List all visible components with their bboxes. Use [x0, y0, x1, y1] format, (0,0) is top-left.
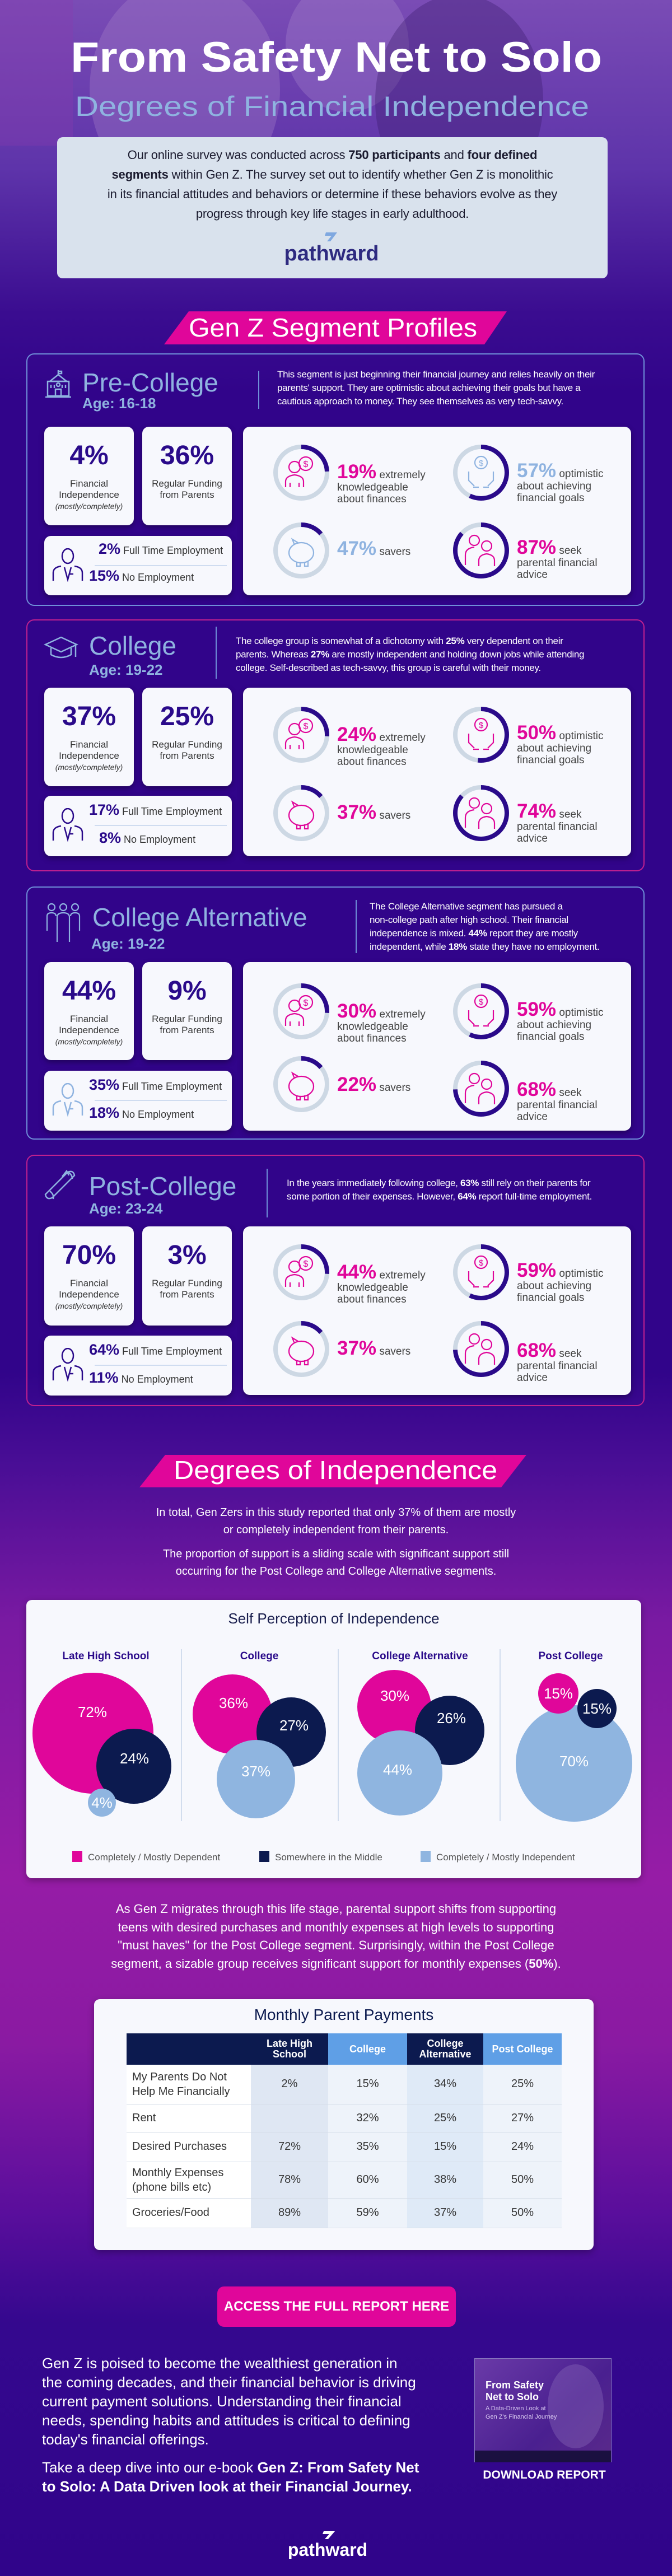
stat: financial independence — [44, 962, 134, 1060]
description: cautious approach to money. They see themselves as very tech-savvy. — [277, 396, 563, 407]
description — [277, 369, 595, 407]
employment box: 18% No Employment — [89, 1104, 194, 1121]
stats box with rings: 68% seek — [517, 1340, 581, 1361]
button: access full report — [217, 2286, 456, 2327]
description: The college group is somewhat of a dichotomy with 25% very dependent on their — [236, 636, 563, 646]
stats box with rings: financial goals — [517, 754, 584, 766]
table: Monthly Parent Payments: Post College — [492, 2043, 553, 2054]
icon: mortarboard — [44, 636, 78, 659]
stats box with rings: advice — [517, 1372, 548, 1384]
stat: regular funding: from Parents — [160, 489, 214, 500]
table: Monthly Parent Payments: 24% — [511, 2140, 534, 2153]
book cover: download report: Gen Z's Financial Journey — [486, 2414, 557, 2420]
chart: Self Perception of Independence: Post College — [538, 1650, 603, 1662]
stats box with rings: parental financial — [517, 1099, 598, 1111]
employment box: 17% Full Time Employment — [89, 801, 222, 818]
stat: regular funding: Regular Funding — [152, 1278, 222, 1289]
stat: financial independence: Financial — [70, 1014, 108, 1024]
table: Monthly Parent Payments: 2% — [282, 2078, 297, 2090]
icon: diploma — [45, 1169, 75, 1200]
degrees intro text: The proportion of support is a sliding scale with significant support still — [163, 1548, 509, 1560]
table: Monthly Parent Payments: 37% — [434, 2206, 456, 2219]
employment box — [44, 536, 232, 595]
table: Monthly Parent Payments: 50% — [511, 2173, 534, 2186]
description — [370, 901, 599, 952]
stat: financial independence: Financial — [70, 478, 108, 489]
stats box with rings: knowledgeable — [337, 482, 408, 493]
chart: Self Perception of Independence: 15% — [544, 1685, 573, 1702]
description: This segment is just beginning their financial journey and relies heavily on their — [277, 369, 595, 380]
stat: financial independence: Financial — [70, 739, 108, 750]
button: access full report: ACCESS THE FULL REPORT HERE — [224, 2299, 449, 2314]
stats box with rings: about achieving — [517, 743, 591, 754]
table: Monthly Parent Payments: 50% — [511, 2206, 534, 2219]
employment box — [44, 796, 232, 856]
stats box with rings: financial goals — [517, 1031, 584, 1043]
footer logo: pathward — [288, 2540, 367, 2559]
stat: regular funding — [142, 688, 232, 786]
table: Monthly Parent Payments: Monthly Expenses — [132, 2166, 223, 2178]
stats box with rings: about finances — [337, 493, 407, 505]
stats box with rings: knowledgeable — [337, 1021, 408, 1033]
heading: College Alternative — [92, 903, 307, 932]
bubbles: college alternative — [357, 1670, 484, 1816]
stat: regular funding: from Parents — [160, 1289, 214, 1300]
heading: Post-College — [89, 1172, 236, 1201]
closing text: current payment solutions. Understanding their financial — [42, 2393, 402, 2410]
chart: Self Perception of Independence: 72% — [78, 1704, 107, 1720]
panel: Post-College — [26, 1155, 645, 1406]
stat: financial independence: Independence — [59, 489, 119, 500]
icon: building — [45, 370, 71, 398]
hero photo background shapes — [0, 0, 543, 146]
stat: financial independence: Financial — [70, 1278, 108, 1289]
stat: financial independence: 44% — [62, 976, 116, 1006]
table: Monthly Parent Payments: Alternative — [419, 2048, 472, 2060]
chart: Self Perception of Independence: 24% — [120, 1750, 149, 1767]
ring: knowledgeable 44%: $ — [304, 1259, 309, 1269]
closing text: to Solo: A Data Driven look at their Financial Journey. — [42, 2478, 412, 2495]
ring: savers 37% — [273, 785, 329, 841]
title: Degrees of Financial Independence — [75, 91, 589, 122]
ring: savers 47% — [273, 522, 329, 578]
title — [71, 34, 602, 122]
stats box with rings — [243, 962, 631, 1131]
legend: Somewhere in the Middle — [275, 1852, 382, 1863]
book cover: download report — [474, 2358, 612, 2481]
intro text — [108, 148, 558, 221]
table: Monthly Parent Payments: Desired Purchases — [132, 2140, 227, 2153]
stat: financial independence: (mostly/completely) — [55, 1037, 123, 1046]
stats box with rings: 59% optimistic — [517, 1259, 604, 1281]
stats box with rings: about achieving — [517, 1280, 591, 1292]
legend: Completely / Mostly Independent — [436, 1852, 575, 1863]
banner: Degrees of Independence: Degrees of Independence — [174, 1455, 497, 1485]
panel: College — [26, 619, 645, 871]
bubbles: college — [193, 1674, 326, 1818]
panel: Pre-College — [26, 353, 645, 606]
table: Monthly Parent Payments: 35% — [356, 2140, 379, 2153]
table: Monthly Parent Payments: 25% — [511, 2078, 534, 2090]
table: Monthly Parent Payments: 78% — [278, 2173, 301, 2186]
stats box with rings: 68% seek — [517, 1079, 581, 1100]
description: parents. Whereas 27% are mostly independent and holding down jobs while attending — [236, 649, 584, 660]
description — [287, 1178, 592, 1202]
description: independent, while 18% state they have no employment. — [370, 941, 599, 952]
stats box with rings: 87% seek — [517, 536, 581, 558]
stats box with rings: 19% extremely — [337, 461, 426, 483]
closing text — [42, 2355, 419, 2495]
ring: knowledgeable 19%: $ — [304, 460, 309, 469]
ring: optimistic 59%: $ — [479, 997, 484, 1007]
download label: DOWNLOAD REPORT — [483, 2468, 606, 2481]
banner: Degrees of Independence — [139, 1455, 526, 1487]
stat: regular funding: from Parents — [160, 1025, 214, 1035]
stat: financial independence: Independence — [59, 1025, 119, 1035]
ring: knowledgeable 24% — [273, 707, 329, 763]
paragraph: parental support shift: teens with desired purchases and monthly expenses at high levels to supporting — [118, 1920, 554, 1934]
ring: optimistic 57%: $ — [479, 459, 484, 468]
panel: Pre-College: Age: 16-18 — [82, 395, 156, 412]
paragraph: parental support shift — [111, 1902, 561, 1970]
closing text: needs, spending habits and attitudes is critical to defining — [42, 2412, 410, 2429]
stats box with rings: 37% savers — [337, 1337, 410, 1359]
paragraph: parental support shift: segment, a sizable group receives significant support for monthly expenses (50%). — [111, 1957, 561, 1970]
closing text: the coming decades, and their financial behavior is driving — [42, 2374, 416, 2391]
employment box: 8% No Employment — [99, 829, 195, 846]
ring: optimistic 50% — [453, 707, 509, 763]
ring: parental advice 74% — [453, 785, 509, 841]
ring: savers 37% — [273, 1321, 329, 1377]
ring: optimistic 59%: $ — [479, 1258, 484, 1268]
chart: Self Perception of Independence: 4% — [91, 1794, 113, 1811]
ring: savers 22% — [273, 1056, 329, 1112]
book cover: download report: From Safety — [486, 2379, 544, 2391]
panel: College Alternative — [26, 886, 645, 1140]
stats box with rings: about achieving — [517, 1019, 591, 1031]
stats box with rings: 57% optimistic — [517, 460, 604, 482]
chart: Self Perception of Independence: Late High School — [62, 1650, 150, 1662]
closing text: today's financial offerings. — [42, 2431, 209, 2448]
heading: Pre-College — [82, 368, 218, 397]
table: Monthly Parent Payments: 34% — [434, 2078, 456, 2090]
table: Monthly Parent Payments: 32% — [356, 2111, 379, 2124]
stats box with rings: parental financial — [517, 821, 598, 833]
table: Monthly Parent Payments: 38% — [434, 2173, 456, 2186]
description: non-college path after high school. Their financial — [370, 914, 568, 925]
panel: Post-College: Age: 23-24 — [89, 1200, 162, 1217]
panel: College Alternative: Age: 19-22 — [91, 935, 165, 952]
stat: regular funding: Regular Funding — [152, 739, 222, 750]
table: Monthly Parent Payments: Monthly Parent Payments — [254, 2006, 433, 2023]
employment box — [44, 1071, 232, 1131]
description: college. Self-described as tech-savvy, this group is careful with their money. — [236, 662, 541, 673]
stats box with rings — [243, 427, 631, 595]
paragraph: parental support shift: "must haves" for the Post College segment. Surprisingly, within the Post College — [118, 1938, 554, 1952]
description: parents' support. They are optimistic about achieving their goals but have a — [277, 382, 580, 393]
paragraph: parental support shift: As Gen Z migrates through this life stage, parental support shifts from supporting — [116, 1902, 556, 1916]
stats box with rings: about finances — [337, 1033, 407, 1044]
table: Monthly Parent Payments: School — [273, 2048, 306, 2060]
stats box with rings: advice — [517, 1111, 548, 1123]
stat: financial independence: (mostly/completely) — [55, 502, 123, 511]
book cover: download report: Net to Solo — [486, 2391, 539, 2402]
stat: financial independence: (mostly/completely) — [55, 763, 123, 772]
stats box with rings: knowledgeable — [337, 744, 408, 756]
stats box with rings: 50% optimistic — [517, 722, 604, 744]
employment box — [44, 1336, 232, 1396]
degrees intro text: occurring for the Post College and College Alternative segments. — [176, 1565, 496, 1578]
stat: regular funding: from Parents — [160, 750, 214, 761]
stats box with rings — [243, 688, 631, 856]
stats box with rings: about finances — [337, 756, 407, 768]
stats box with rings: financial goals — [517, 1292, 584, 1304]
chart: Self Perception of Independence: 30% — [380, 1687, 409, 1704]
bubbles: post college — [516, 1673, 632, 1822]
chart: Self Perception of Independence: Self Perception of Independence — [228, 1610, 440, 1627]
closing text: Take a deep dive into our e-book Gen Z: From Safety Net — [42, 2459, 419, 2476]
heading: College — [89, 631, 176, 660]
ring: parental advice 68% — [453, 1061, 509, 1117]
stat: regular funding — [142, 427, 232, 525]
table: Monthly Parent Payments: Groceries/Food — [132, 2206, 209, 2219]
chart: Self Perception of Independence: 70% — [559, 1753, 589, 1770]
ring: knowledgeable 24%: $ — [304, 722, 309, 731]
table: Monthly Parent Payments: Rent — [132, 2111, 156, 2124]
table: Monthly Parent Payments — [94, 1999, 594, 2250]
stat: regular funding: Regular Funding — [152, 478, 222, 489]
table: Monthly Parent Payments: 15% — [434, 2140, 456, 2153]
stat: regular funding: 25% — [160, 702, 214, 731]
degrees intro text — [156, 1506, 516, 1578]
ring: knowledgeable 30% — [273, 983, 329, 1039]
stat: regular funding: 9% — [167, 976, 207, 1006]
book cover: download report: A Data-Driven Look at — [486, 2405, 546, 2412]
stats box with rings: knowledgeable — [337, 1282, 408, 1294]
stat: financial independence — [44, 1226, 134, 1326]
stat: financial independence — [44, 688, 134, 786]
chart: Self Perception of Independence: 44% — [383, 1761, 412, 1778]
employment box: 35% Full Time Employment — [89, 1076, 222, 1093]
intro text: segments within Gen Z. The survey set out to identify whether Gen Z is monolithic — [112, 167, 553, 181]
stats box with rings: 24% extremely — [337, 724, 426, 745]
stat: financial independence: Independence — [59, 750, 119, 761]
employment box: 15% No Employment — [89, 567, 194, 584]
table: Monthly Parent Payments: Late High — [267, 2038, 312, 2049]
description: some portion of their expenses. However, 64% report full-time employment. — [287, 1191, 592, 1202]
intro text: Our online survey was conducted across 750 participants and four defined — [128, 148, 537, 162]
ring: parental advice 68% — [453, 1321, 509, 1377]
stat: regular funding — [142, 1226, 232, 1326]
stats box with rings: 44% extremely — [337, 1261, 426, 1283]
stats box with rings: 74% seek — [517, 800, 581, 822]
employment box: 64% Full Time Employment — [89, 1341, 222, 1358]
stat: financial independence: 70% — [62, 1240, 116, 1270]
chart: Self Perception of Independence: 26% — [437, 1710, 466, 1726]
stats box with rings: parental financial — [517, 1360, 598, 1372]
chart: Self Perception of Independence — [26, 1600, 641, 1878]
stats box with rings — [243, 1226, 631, 1395]
ring: parental advice 87% — [453, 522, 509, 578]
table: Monthly Parent Payments: 27% — [511, 2111, 534, 2124]
stats box with rings: 30% extremely — [337, 1000, 426, 1022]
stats box with rings: 59% optimistic — [517, 998, 604, 1020]
stat: financial independence: Independence — [59, 1289, 119, 1300]
table: Monthly Parent Payments: 25% — [434, 2111, 456, 2124]
chart: Self Perception of Independence: 15% — [582, 1700, 612, 1717]
stats box with rings: 47% savers — [337, 538, 410, 559]
icon: people — [46, 903, 81, 942]
intro text: progress through key life stages in early adulthood. — [196, 207, 469, 221]
stats box with rings: about achieving — [517, 480, 591, 492]
legend: Completely / Mostly Dependent — [88, 1852, 221, 1863]
stats box with rings: 22% savers — [337, 1074, 410, 1095]
chart: Self Perception of Independence: 27% — [279, 1717, 309, 1734]
ring: optimistic 59% — [453, 1244, 509, 1300]
table: Monthly Parent Payments: College — [427, 2038, 464, 2049]
title: From Safety Net to Solo — [71, 34, 602, 81]
employment box: 2% Full Time Employment — [99, 540, 223, 557]
description: In the years immediately following college, 63% still rely on their parents for — [287, 1178, 590, 1188]
description: independence is mixed. 44% report they are mostly — [370, 928, 578, 939]
stat: regular funding: 36% — [160, 441, 214, 470]
panel: College: Age: 19-22 — [89, 661, 162, 678]
chart: Self Perception of Independence: College — [240, 1650, 278, 1662]
table: Monthly Parent Payments: College — [349, 2043, 386, 2054]
stat: financial independence: (mostly/completely) — [55, 1301, 123, 1310]
chart: Self Perception of Independence: 36% — [219, 1695, 248, 1711]
table: Monthly Parent Payments: (phone bills etc) — [132, 2181, 211, 2193]
stat: financial independence: 4% — [69, 441, 109, 470]
closing text: Gen Z is poised to become the wealthiest generation in — [42, 2355, 398, 2372]
employment box: 11% No Employment — [89, 1369, 193, 1386]
table: Monthly Parent Payments: 89% — [278, 2206, 301, 2219]
degrees intro text: In total, Gen Zers in this study reported that only 37% of them are mostly — [156, 1506, 516, 1519]
ring: optimistic 59% — [453, 983, 509, 1039]
stat: regular funding: Regular Funding — [152, 1014, 222, 1024]
stats box with rings: advice — [517, 833, 548, 844]
bubbles: late high school — [32, 1673, 171, 1817]
table: Monthly Parent Payments: 15% — [356, 2078, 379, 2090]
chart: Self Perception of Independence: 37% — [241, 1763, 270, 1780]
intro box — [57, 137, 608, 278]
stat: financial independence — [44, 427, 134, 525]
intro text: in its financial attitudes and behaviors or determine if these behaviors evolve as they — [108, 187, 557, 201]
description — [236, 636, 584, 673]
table: Monthly Parent Payments: 72% — [278, 2140, 301, 2153]
legend — [72, 1851, 575, 1863]
stat: regular funding — [142, 962, 232, 1060]
chart: Self Perception of Independence: College Alternative — [372, 1650, 468, 1662]
ring: optimistic 50%: $ — [479, 721, 484, 730]
stats box with rings: parental financial — [517, 557, 598, 569]
stats box with rings: 37% savers — [337, 801, 410, 823]
stats box with rings: about finances — [337, 1294, 407, 1305]
table: Monthly Parent Payments: 59% — [356, 2206, 379, 2219]
ring: knowledgeable 19% — [273, 445, 329, 501]
stats box with rings: financial goals — [517, 492, 584, 504]
stat: regular funding: 3% — [167, 1240, 207, 1270]
stats box with rings: advice — [517, 569, 548, 581]
table: Monthly Parent Payments: 60% — [356, 2173, 379, 2186]
degrees intro text: or completely independent from their parents. — [223, 1524, 449, 1536]
ring: knowledgeable 44% — [273, 1244, 329, 1300]
table: Monthly Parent Payments: My Parents Do Not — [132, 2071, 227, 2083]
pathward logo: pathward — [284, 242, 379, 265]
table: Monthly Parent Payments: Help Me Financially — [132, 2085, 230, 2098]
ring: knowledgeable 30%: $ — [304, 998, 309, 1008]
description: The College Alternative segment has pursued a — [370, 901, 563, 912]
stat: financial independence: 37% — [62, 702, 116, 731]
ring: optimistic 57% — [453, 445, 509, 501]
banner: Gen Z Segment Profiles: Gen Z Segment Profiles — [189, 313, 477, 342]
